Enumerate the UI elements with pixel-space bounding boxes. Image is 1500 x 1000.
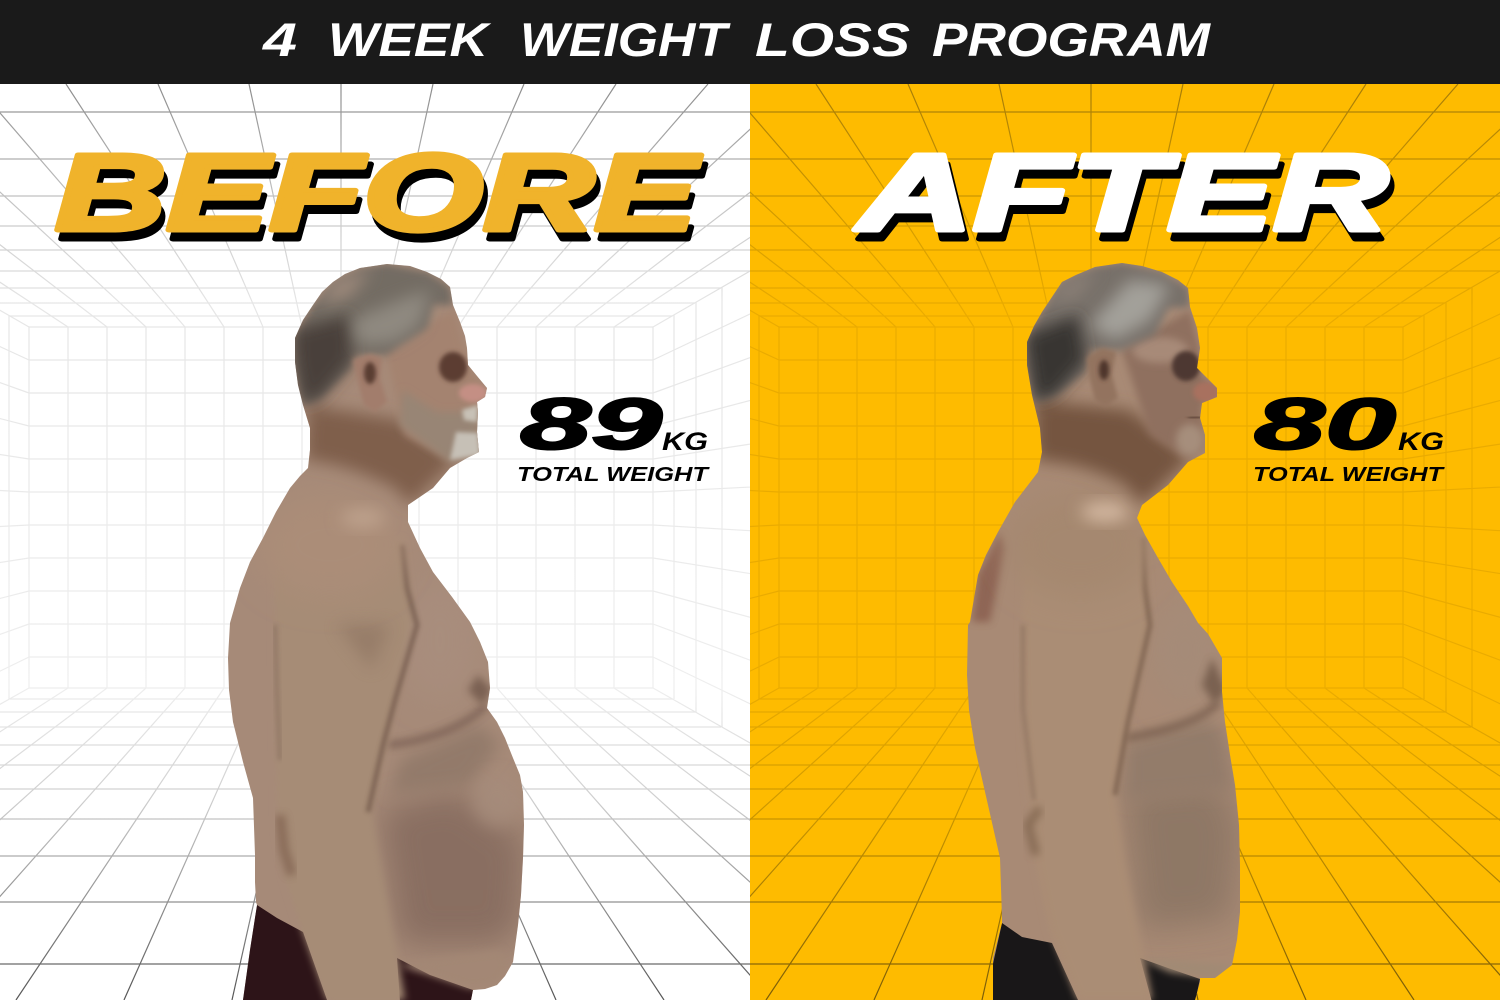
before: belly shading (380, 790, 525, 945)
heading: before: BEFORE (59, 141, 706, 263)
before: eye socket (439, 352, 467, 382)
title: 4 (262, 13, 297, 66)
before: shorts (240, 905, 473, 1000)
after: eye socket (1172, 351, 1200, 381)
after: belly shading (1125, 780, 1240, 930)
heading: after: AFTER (858, 141, 1392, 263)
heading: before: BEFORE (55, 132, 702, 254)
heading: before (55, 132, 706, 263)
before: hair (295, 264, 453, 405)
before: ear (353, 354, 387, 412)
stat: after weight: TOTAL WEIGHT (1253, 464, 1445, 486)
after: back mark (972, 532, 1005, 622)
before: nose (459, 384, 487, 402)
after: shorts (985, 923, 1200, 1000)
after person photo (955, 255, 1255, 1000)
stat: before weight: 89 (520, 385, 662, 465)
title: LOSS (755, 13, 910, 66)
heading: after: AFTER (854, 132, 1388, 254)
title: PROGRAM (932, 13, 1211, 66)
stat: after weight: 80 (1254, 385, 1396, 465)
title: WEIGHT (520, 13, 732, 66)
after: nose (1193, 382, 1219, 402)
after: arm (1048, 870, 1157, 1000)
header bar (0, 0, 1500, 84)
title (262, 13, 1211, 66)
panel: after background (750, 84, 1500, 1000)
before: shoulder (254, 495, 406, 568)
stat: after weight (1253, 385, 1445, 486)
title: WEEK (328, 13, 491, 66)
before: face (394, 312, 487, 447)
before perspective grid (0, 84, 750, 1000)
after: ear (1087, 348, 1118, 407)
after: hair (1027, 263, 1190, 402)
after: shoulder (1137, 513, 1155, 574)
stat: before weight (517, 385, 710, 486)
before: neck (305, 405, 455, 505)
after: neck (1035, 400, 1190, 505)
before person photo (220, 255, 540, 1000)
after: mouth (1188, 417, 1202, 418)
stat: after weight: KG (1398, 428, 1444, 456)
after: chest (1180, 594, 1222, 658)
after perspective grid (750, 84, 1500, 1000)
stat: before weight: TOTAL WEIGHT (517, 464, 710, 486)
heading: after (854, 132, 1392, 263)
before: beard stubble (402, 396, 479, 460)
panel: before background (0, 84, 750, 1000)
before: chest (436, 576, 486, 656)
after: face (1122, 312, 1211, 446)
stat: before weight: KG (662, 428, 708, 456)
before: arm (296, 836, 410, 1000)
